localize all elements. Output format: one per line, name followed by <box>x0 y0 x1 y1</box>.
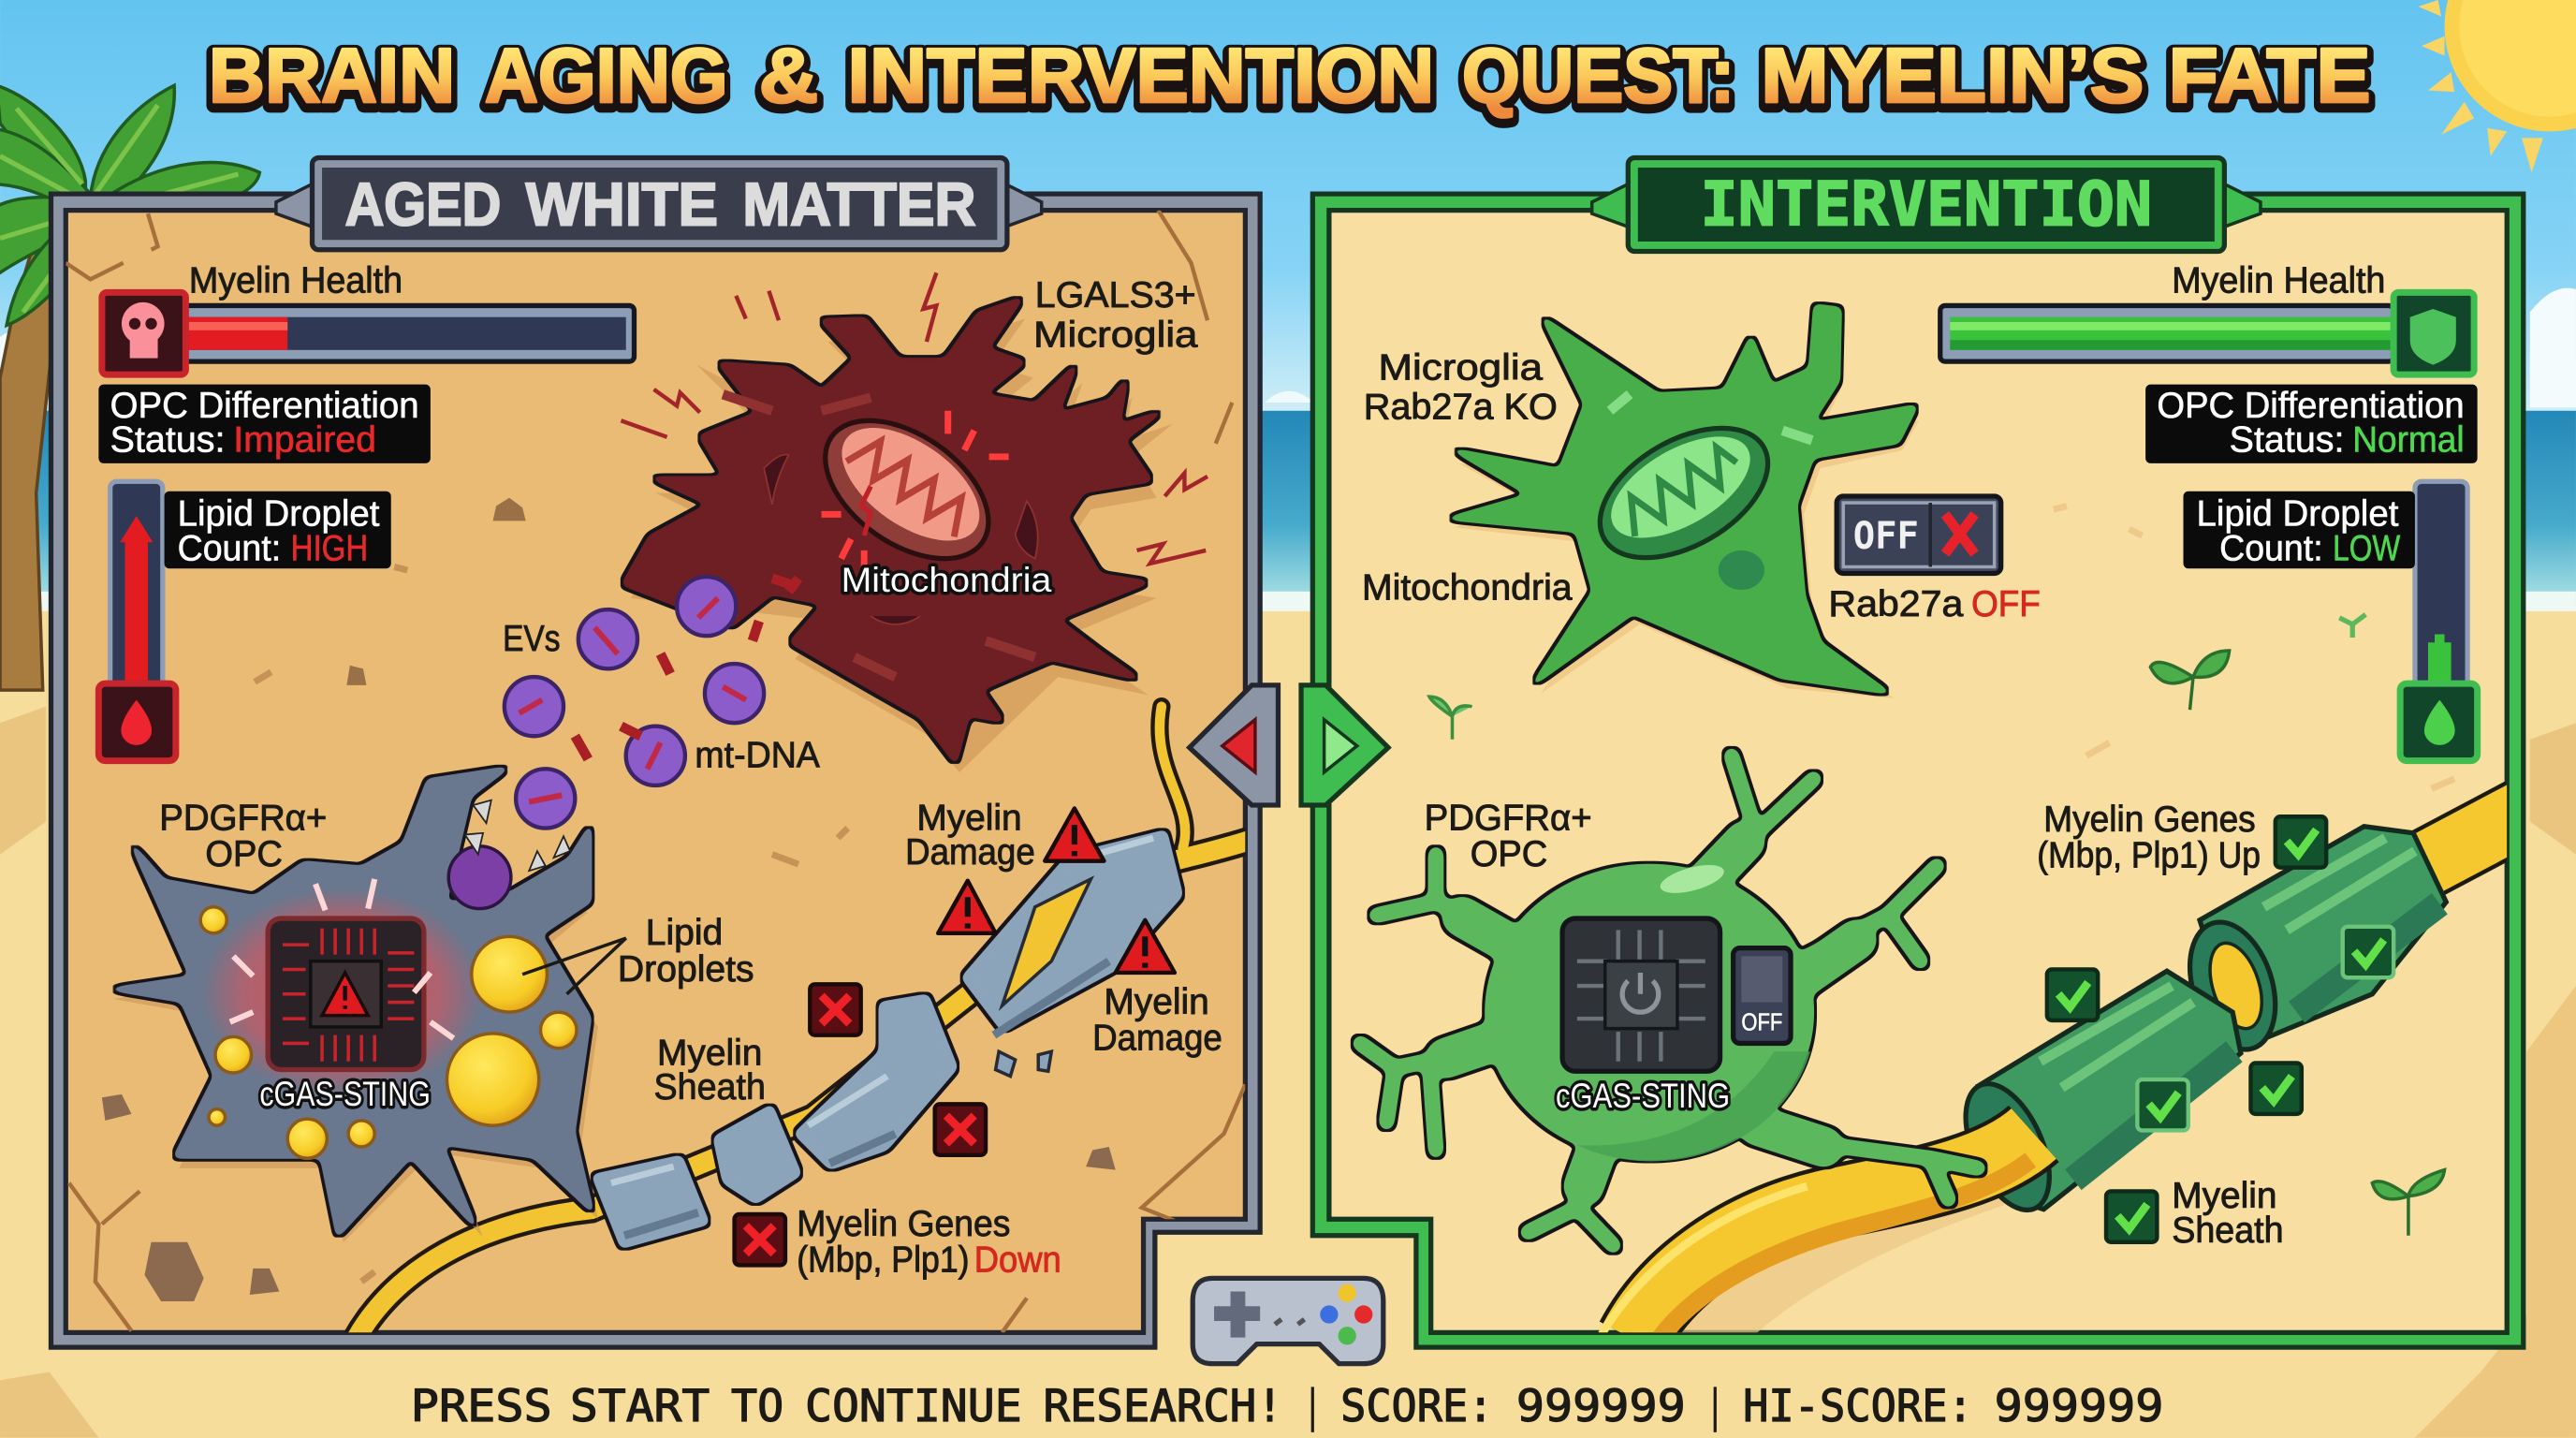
label: myelin genes up: (Mbp, Plp1) Up <box>2037 836 2261 876</box>
icon: palm tree <box>0 85 259 690</box>
title: MYELIN’S <box>1761 33 2144 119</box>
status line: PRESS <box>411 1381 552 1432</box>
axon lower section <box>1602 1134 2034 1339</box>
title: INTERVENTION <box>848 36 1434 122</box>
myelin sheath and axon: healthy <box>1602 814 2522 1347</box>
heading plaque: aged white matter <box>276 157 1042 250</box>
axon upper section <box>2382 814 2522 888</box>
cell: gray PDGFRa+ OPC <box>102 766 598 1242</box>
title: BRAIN <box>209 33 455 119</box>
label: myelin genes down <box>797 1204 1061 1280</box>
title: FATE <box>2169 33 2371 119</box>
label: Rab27a off: Rab27a <box>1828 584 1964 624</box>
status box: lipid droplet count high: HIGH <box>291 528 368 568</box>
status box: lipid droplet count low: Lipid Droplet <box>2197 494 2399 535</box>
title: AGING <box>485 36 728 122</box>
check marks <box>2047 816 2393 1242</box>
extracellular vesicles <box>505 577 798 829</box>
heading plaque: aged white matter: AGED <box>345 169 501 238</box>
label: lipid droplets with pointers <box>522 913 754 994</box>
label: myelin damage right: Damage <box>1092 1018 1222 1058</box>
status line <box>411 1381 2163 1432</box>
switch: Rab27a off: OFF <box>1853 514 1919 558</box>
status line: START <box>570 1381 710 1432</box>
label: myelin damage right: Myelin <box>1104 982 1209 1022</box>
status line: RESEARCH! <box>1044 1381 1283 1432</box>
label: mitochondria: Mitochondria <box>842 561 1052 599</box>
label: myelin genes up <box>2037 800 2261 876</box>
status box: OPC differentiation impaired: Status: <box>110 420 225 461</box>
status box: OPC differentiation normal: Normal <box>2352 420 2465 461</box>
status line: | <box>1707 1381 1723 1432</box>
label: PDGFRa+ OPC: PDGFRα+ <box>1425 798 1592 838</box>
warning icons <box>938 808 1175 973</box>
status line: CONTINUE <box>805 1381 1022 1432</box>
labels: microglia Rab27a KO: Microglia <box>1379 347 1544 388</box>
label: myelin genes up: Myelin Genes <box>2043 800 2256 840</box>
chip: cGAS-STING powered off <box>1562 918 1720 1071</box>
myelin health bar: low <box>102 260 634 374</box>
lipid droplet meter: high <box>98 481 176 761</box>
title: MYELIN’S <box>1761 36 2144 122</box>
label: LGALS3+ microglia: Microglia <box>1033 315 1198 355</box>
ground cracks and rocks <box>66 211 1245 1332</box>
icon: game controller <box>1193 1278 1383 1364</box>
label: myelin genes down: Myelin Genes <box>797 1204 1010 1244</box>
label: lipid droplets with pointers: Lipid <box>646 913 723 953</box>
status line: | <box>1305 1381 1321 1432</box>
status line: TO <box>731 1381 783 1432</box>
axon: left <box>353 707 1257 1344</box>
title: FATE <box>2169 36 2371 122</box>
heading plaque: aged white matter: MATTER <box>742 169 976 238</box>
title: AGING <box>485 33 728 119</box>
sheath segment lower <box>1949 971 2241 1223</box>
label: PDGFRa+ OPC: PDGFRα+ <box>159 798 327 838</box>
icon: skull <box>102 292 185 374</box>
heading plaque: aged white matter: WHITE <box>526 169 718 238</box>
myelin health bar: full <box>1940 260 2474 374</box>
decorative sprouts <box>1429 506 2454 1236</box>
neuron: Rab27a KO microglia <box>1441 304 1919 698</box>
label: PDGFRa+ OPC: OPC <box>1471 834 1547 874</box>
chip: cGAS-STING alert <box>268 918 424 1070</box>
label: myelin sheath <box>2172 1176 2284 1251</box>
cell: green PDGFRa+ OPC <box>1360 756 1978 1245</box>
status box: OPC differentiation impaired <box>98 385 431 463</box>
myelin health bar: full: Myelin Health <box>2172 260 2385 301</box>
title: QUEST: <box>1462 33 1734 119</box>
mitochondrion: healthy <box>1578 402 1790 584</box>
status box: lipid droplet count high: Lipid Droplet <box>178 494 380 535</box>
label: PDGFRa+ OPC <box>159 798 327 874</box>
status box: lipid droplet count low: LOW <box>2333 528 2401 568</box>
lipid droplets <box>200 907 577 1158</box>
label: Rab27a off: OFF <box>1971 584 2041 624</box>
sheath segment upper <box>2174 827 2446 1061</box>
status box: lipid droplet count low <box>2183 492 2415 568</box>
myelin health bar: low: Myelin Health <box>189 260 402 301</box>
engulfed vesicle and teeth <box>448 800 570 909</box>
panel frame <box>1312 194 2524 1347</box>
label: Rab27a off <box>1828 584 2041 624</box>
heading plaque: intervention <box>1592 157 2261 252</box>
status box: OPC differentiation impaired: OPC Differentiation <box>110 386 419 426</box>
labels: EVs and mt-DNA: EVs <box>503 619 561 659</box>
status box: lipid droplet count high <box>165 492 391 568</box>
panel: intervention <box>1312 157 2524 1347</box>
status box: lipid droplet count high: Count: <box>178 528 281 568</box>
title: & <box>759 33 818 119</box>
label: LGALS3+ microglia: LGALS3+ <box>1035 275 1196 315</box>
labels: EVs and mt-DNA <box>503 619 820 776</box>
label: myelin sheath: Myelin <box>2172 1176 2277 1216</box>
axon shadow on sand <box>1632 1198 2006 1333</box>
label: LGALS3+ microglia <box>1033 275 1198 355</box>
status box: OPC differentiation normal: Status: <box>2230 420 2344 461</box>
mitochondrion: damaged <box>800 392 1014 587</box>
switch: off: OFF <box>1741 1007 1782 1035</box>
status box: lipid droplet count low: Count: <box>2219 528 2323 568</box>
neuron: LGALS3+ microglia <box>621 296 1173 772</box>
label: myelin sheath: Myelin <box>657 1033 762 1073</box>
icon: shield <box>2393 292 2474 374</box>
status line: SCORE: <box>1340 1381 1493 1432</box>
title: INTERVENTION <box>848 33 1434 119</box>
title <box>209 33 2371 122</box>
label: myelin damage top: Damage <box>905 832 1035 873</box>
status box: OPC differentiation normal: OPC Differentiation <box>2157 386 2465 426</box>
title: & <box>759 36 818 122</box>
title: QUEST: <box>1462 36 1734 122</box>
label: mitochondria: Mitochondria <box>1362 568 1573 609</box>
arrow: left, to aged panel <box>1190 685 1278 805</box>
switch: off <box>1734 948 1791 1043</box>
red X markers <box>735 984 986 1265</box>
lipid droplet meter: low <box>2400 481 2478 761</box>
label: myelin damage top <box>905 798 1035 873</box>
icon: sun <box>2418 0 2576 172</box>
labels: microglia Rab27a KO: Rab27a KO <box>1364 388 1558 428</box>
label: myelin sheath: Sheath <box>654 1067 766 1108</box>
label: myelin sheath: Sheath <box>2172 1211 2284 1251</box>
label: lipid droplets with pointers: Droplets <box>618 949 754 990</box>
heading plaque: intervention: INTERVENTION <box>1701 169 2152 240</box>
status line: 999999 <box>1516 1381 1686 1432</box>
label: myelin genes down: (Mbp, Plp1) <box>797 1240 970 1280</box>
status box: OPC differentiation impaired: Impaired <box>233 420 376 461</box>
status line: HI-SCORE: <box>1743 1381 1973 1432</box>
status box: OPC differentiation normal <box>2145 385 2478 463</box>
label: PDGFRa+ OPC: OPC <box>205 834 283 874</box>
stress marks around microglia <box>621 272 1208 564</box>
label: cGAS-STING: cGAS-STING <box>1556 1077 1730 1115</box>
label: PDGFRa+ OPC <box>1425 798 1592 874</box>
label: cGAS-STING: cGAS-STING <box>259 1075 431 1113</box>
myelin sheath fragments: damaged <box>592 829 1183 1249</box>
arrow: right, to intervention panel <box>1301 685 1388 805</box>
title: BRAIN <box>209 36 455 122</box>
switch: Rab27a off <box>1837 496 2001 574</box>
status line: 999999 <box>1995 1381 2163 1432</box>
panel frame <box>51 194 1260 1347</box>
label: myelin genes down: Down <box>974 1240 1061 1280</box>
label: myelin damage top: Myelin <box>916 798 1022 838</box>
panel: aged white matter <box>51 157 1260 1347</box>
labels: EVs and mt-DNA: mt-DNA <box>695 736 820 776</box>
label: myelin sheath <box>654 1033 766 1108</box>
label: myelin damage right <box>1092 982 1222 1058</box>
labels: microglia Rab27a KO <box>1364 347 1558 428</box>
